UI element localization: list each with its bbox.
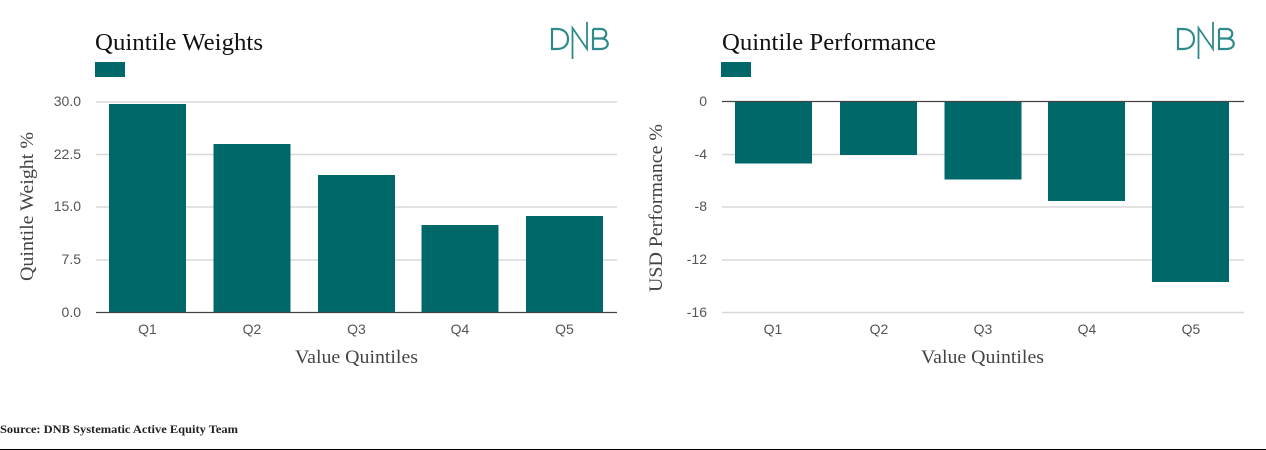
y axis tick labels: -4 bbox=[695, 146, 707, 162]
x axis tick labels: Q4 bbox=[451, 321, 470, 337]
y axis tick labels: -16 bbox=[687, 304, 707, 320]
y axis tick labels: 15.0 bbox=[54, 198, 81, 214]
y axis tick labels: 0.0 bbox=[62, 304, 81, 320]
y axis title: USD Performance % bbox=[646, 124, 667, 292]
x axis tick labels: Q3 bbox=[974, 321, 993, 337]
heading: Quintile Weights: Quintile Weights bbox=[95, 29, 263, 56]
y axis tick labels: 22.5 bbox=[54, 146, 81, 162]
y axis tick labels: 30.0 bbox=[54, 93, 81, 109]
bar chart: weights bbox=[109, 104, 603, 312]
y axis tick labels: -8 bbox=[695, 198, 707, 214]
x axis tick labels: Q5 bbox=[555, 321, 574, 337]
y axis tick labels bbox=[687, 93, 707, 320]
y axis tick labels: 0 bbox=[699, 93, 707, 109]
panel: quintile weights bbox=[17, 22, 617, 368]
x axis tick labels: Q4 bbox=[1078, 321, 1097, 337]
x axis tick labels: Q2 bbox=[243, 321, 262, 337]
y axis tick labels bbox=[54, 93, 81, 320]
x axis tick labels: Q1 bbox=[764, 321, 783, 337]
y axis gridlines bbox=[96, 102, 617, 260]
icon: DNB logo bbox=[1178, 22, 1234, 59]
x axis tick labels: Q2 bbox=[870, 321, 889, 337]
y axis tick labels: 7.5 bbox=[62, 251, 81, 267]
panel: quintile performance bbox=[646, 22, 1244, 368]
x axis tick labels: Q5 bbox=[1182, 321, 1201, 337]
x axis tick labels bbox=[138, 321, 574, 337]
source note: Source: DNB Systematic Active Equity Team bbox=[0, 422, 238, 436]
heading: Quintile Performance: Quintile Performance bbox=[722, 29, 936, 56]
zero line bbox=[722, 100, 1244, 102]
legend swatch bbox=[721, 62, 751, 77]
x axis tick labels: Q3 bbox=[347, 321, 366, 337]
x axis title: Value Quintiles bbox=[921, 347, 1044, 368]
baseline bbox=[96, 312, 617, 314]
legend swatch bbox=[95, 62, 125, 77]
x axis tick labels bbox=[764, 321, 1201, 337]
bottom rule bbox=[0, 448, 1266, 450]
y axis title: Quintile Weight % bbox=[17, 132, 38, 281]
icon: DNB logo bbox=[552, 22, 608, 59]
y axis gridlines bbox=[722, 154, 1244, 312]
bar chart: performance bbox=[735, 102, 1229, 282]
y axis tick labels: -12 bbox=[687, 251, 707, 267]
x axis title: Value Quintiles bbox=[295, 347, 418, 368]
x axis tick labels: Q1 bbox=[138, 321, 157, 337]
